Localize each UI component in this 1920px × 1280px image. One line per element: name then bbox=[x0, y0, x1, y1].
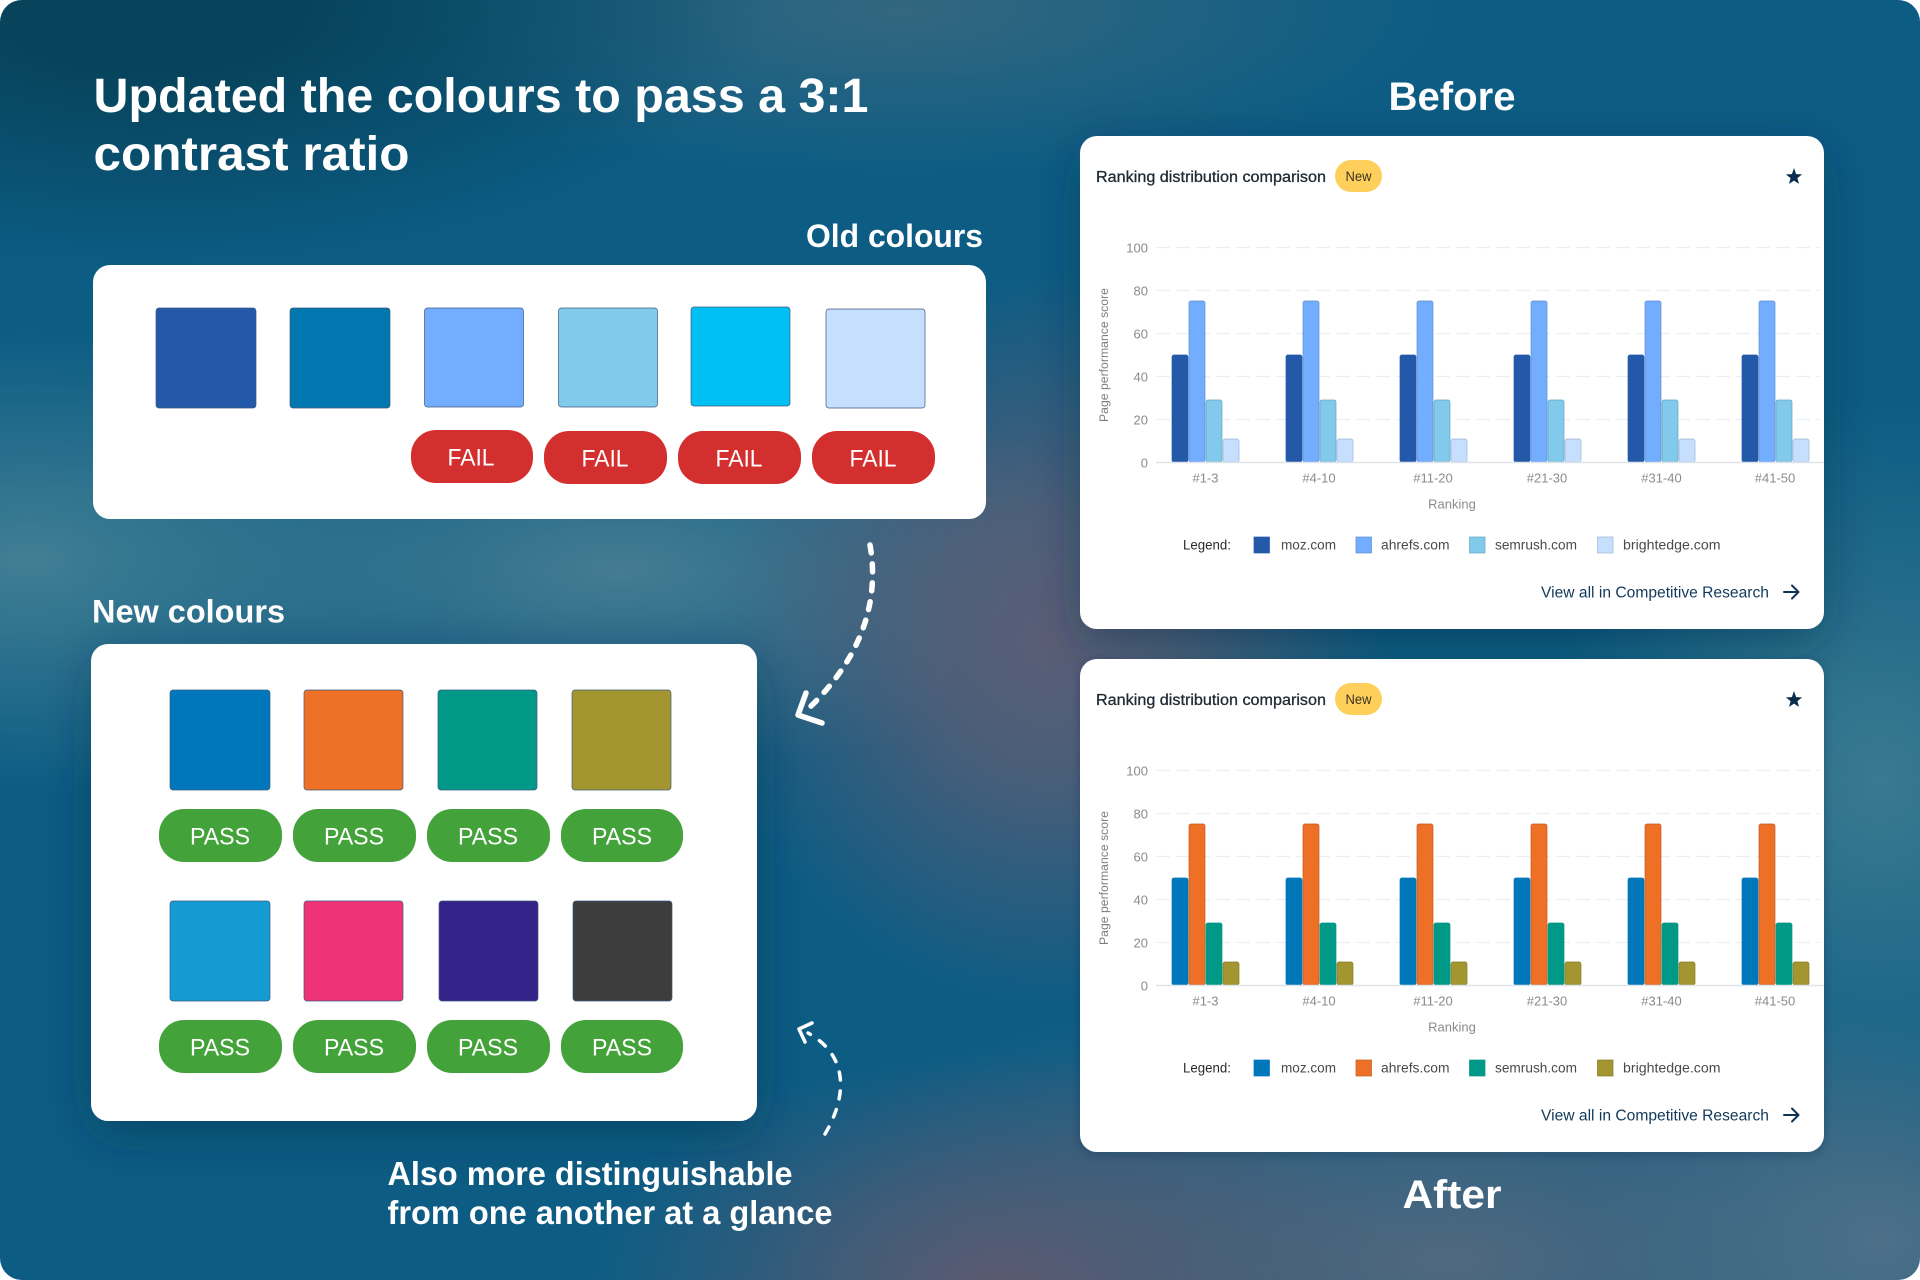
pass badges: PASS bbox=[592, 824, 652, 850]
card title: Ranking distribution comparison bbox=[1096, 692, 1326, 709]
fail badges: FAIL bbox=[448, 444, 494, 472]
x axis labels bbox=[1192, 994, 1795, 1008]
pass badges: PASS bbox=[190, 824, 250, 850]
y axis labels: 80 bbox=[1134, 284, 1148, 298]
new colour swatches bbox=[170, 690, 672, 1001]
badge: new bbox=[1335, 160, 1382, 192]
x axis labels: #21-30 bbox=[1527, 994, 1567, 1008]
legend: semrush.com bbox=[1495, 1060, 1577, 1076]
arrow: old to new colours bbox=[798, 545, 873, 723]
x axis labels: #41-50 bbox=[1755, 470, 1795, 486]
panel: before chart card bbox=[1080, 136, 1824, 629]
x axis labels: #21-30 bbox=[1527, 470, 1567, 486]
x axis labels: #31-40 bbox=[1641, 470, 1682, 486]
y axis labels: 20 bbox=[1134, 936, 1148, 950]
legend: moz.com bbox=[1281, 538, 1336, 552]
pass badges: PASS bbox=[592, 1034, 652, 1062]
fail badges: FAIL bbox=[582, 446, 628, 472]
fail badges: FAIL bbox=[716, 446, 762, 472]
panel: old colours bbox=[93, 265, 986, 519]
legend: ahrefs.com bbox=[1381, 538, 1450, 552]
x axis labels: #11-20 bbox=[1413, 994, 1453, 1008]
old colour swatches bbox=[156, 307, 925, 408]
x axis labels: #4-10 bbox=[1302, 994, 1336, 1008]
x axis labels bbox=[1192, 470, 1795, 486]
y axis labels: 40 bbox=[1134, 370, 1148, 384]
title bbox=[94, 70, 869, 181]
title: Updated the colours to pass a 3:1 bbox=[94, 70, 869, 123]
panel: new colours bbox=[91, 644, 757, 1121]
heading: new colours: New colours bbox=[92, 594, 285, 630]
panel: after chart card bbox=[1080, 659, 1824, 1152]
link: view all: View all in Competitive Research bbox=[1541, 1108, 1769, 1124]
x axis labels: #41-50 bbox=[1755, 994, 1795, 1008]
legend bbox=[1183, 537, 1720, 553]
y axis labels bbox=[1126, 764, 1148, 994]
legend: semrush.com bbox=[1495, 538, 1577, 552]
legend: moz.com bbox=[1281, 1060, 1336, 1076]
bar chart: old palette bbox=[1099, 240, 1824, 512]
bars bbox=[1172, 301, 1809, 462]
heading: after: After bbox=[1402, 1173, 1502, 1217]
x axis title: Ranking bbox=[1428, 1020, 1476, 1034]
y axis title: Page performance score bbox=[1099, 288, 1111, 422]
y axis labels bbox=[1126, 240, 1148, 470]
pass badges: PASS bbox=[324, 1034, 384, 1062]
arrow: note to new colours bbox=[799, 1023, 841, 1134]
note: more distinguishable bbox=[388, 1155, 832, 1231]
pass badges bbox=[159, 809, 683, 1073]
y axis labels: 40 bbox=[1134, 892, 1148, 908]
heading: old colours: Old colours bbox=[806, 218, 983, 254]
heading: before: Before bbox=[1388, 75, 1516, 119]
link: view all: View all in Competitive Research bbox=[1541, 584, 1769, 602]
y axis labels: 60 bbox=[1134, 850, 1148, 864]
pass badges: PASS bbox=[458, 1034, 518, 1062]
y axis title: Page performance score bbox=[1099, 811, 1111, 945]
x axis labels: #4-10 bbox=[1302, 470, 1336, 486]
badge: new bbox=[1335, 683, 1382, 715]
y axis labels: 100 bbox=[1126, 240, 1148, 256]
badge: new: New bbox=[1346, 692, 1372, 707]
y axis labels: 0 bbox=[1141, 978, 1148, 994]
note: more distinguishable: Also more distinguishable bbox=[388, 1155, 792, 1192]
pass badges: PASS bbox=[324, 824, 384, 850]
legend: ahrefs.com bbox=[1381, 1060, 1450, 1076]
note: more distinguishable: from one another at a glance bbox=[388, 1194, 832, 1231]
bar chart: new palette bbox=[1099, 764, 1824, 1034]
legend bbox=[1183, 1060, 1720, 1076]
x axis labels: #11-20 bbox=[1413, 470, 1453, 486]
icon: star bbox=[1786, 168, 1802, 184]
pass badges: PASS bbox=[458, 824, 518, 850]
x axis labels: #1-3 bbox=[1192, 470, 1219, 486]
badge: new: New bbox=[1346, 169, 1372, 184]
x axis labels: #1-3 bbox=[1192, 994, 1219, 1008]
y axis labels: 0 bbox=[1141, 456, 1148, 470]
y axis labels: 20 bbox=[1134, 412, 1148, 428]
icon: star bbox=[1786, 691, 1802, 707]
legend: brightedge.com bbox=[1623, 538, 1720, 552]
legend: Legend: bbox=[1183, 538, 1231, 552]
fail badges bbox=[411, 430, 935, 484]
legend: Legend: bbox=[1183, 1060, 1231, 1076]
pass badges: PASS bbox=[190, 1034, 250, 1062]
fail badges: FAIL bbox=[850, 446, 896, 472]
title: contrast ratio bbox=[94, 128, 410, 181]
x axis title: Ranking bbox=[1428, 496, 1476, 512]
legend: brightedge.com bbox=[1623, 1060, 1720, 1076]
y axis labels: 100 bbox=[1126, 764, 1148, 778]
x axis labels: #31-40 bbox=[1641, 994, 1682, 1008]
y axis labels: 60 bbox=[1134, 326, 1148, 342]
card title: Ranking distribution comparison bbox=[1096, 169, 1326, 186]
bars bbox=[1172, 824, 1809, 985]
y axis labels: 80 bbox=[1134, 806, 1148, 822]
